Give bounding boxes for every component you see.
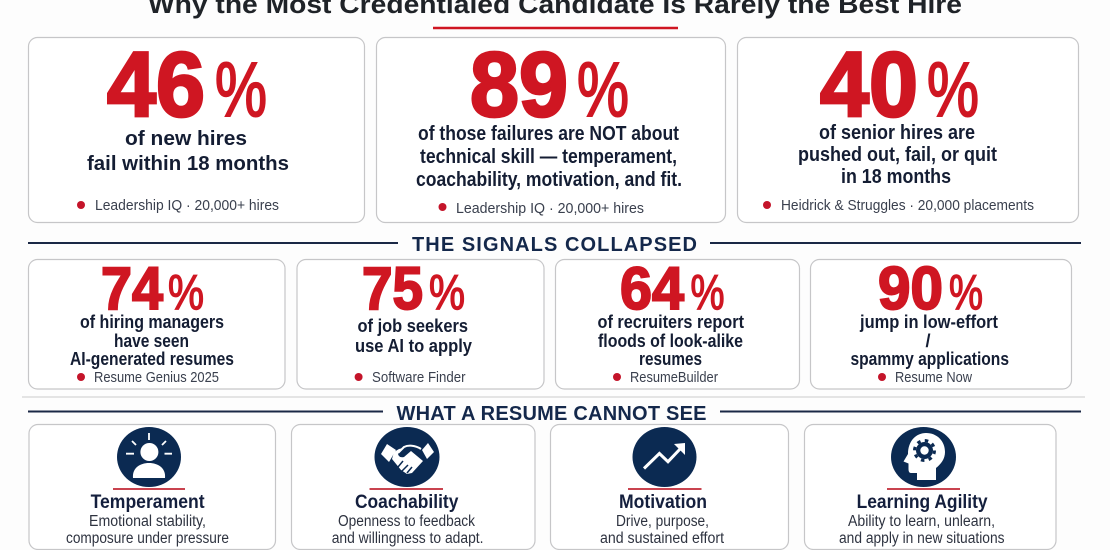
stat: 40%: 40 (820, 34, 918, 136)
panel: 89% not technical (376, 34, 726, 222)
description: of recruiters report (598, 312, 744, 332)
stat: 90%: % (949, 266, 983, 320)
icon: person with rays (117, 427, 181, 487)
stat: 64%: 64 (620, 255, 685, 322)
description (839, 513, 1005, 547)
source: Resume Genius 2025 (94, 369, 219, 386)
description: of hiring managers (80, 312, 224, 332)
description: coachability, motivation, and fit. (416, 168, 682, 191)
description (598, 312, 744, 369)
description (70, 312, 234, 369)
description: pushed out, fail, or quit (798, 143, 997, 166)
source: ResumeBuilder (630, 369, 718, 386)
description: in 18 months (841, 165, 951, 188)
description: jump in low-effort (859, 312, 998, 332)
panel: learning agility (804, 424, 1056, 550)
description (600, 513, 725, 547)
stat: 46%: % (215, 47, 267, 133)
description: / (925, 331, 931, 351)
stat: 89% (470, 34, 629, 136)
stat: 90% (878, 255, 983, 322)
stat: 46%: 46 (107, 34, 205, 136)
source: Software Finder (372, 369, 466, 386)
panel: temperament (29, 424, 276, 550)
description (798, 121, 997, 188)
card title: Motivation (619, 492, 707, 513)
stat: 64% (620, 255, 724, 322)
description: of those failures are NOT about (418, 122, 679, 145)
description: Ability to learn, unlearn, (848, 513, 995, 530)
description: resumes (639, 349, 702, 369)
stat: 46% (107, 34, 267, 136)
description: floods of look-alike (598, 331, 743, 351)
stat: 75% (362, 255, 465, 322)
stat: 74%: % (168, 266, 204, 320)
description: Openness to feedback (338, 513, 475, 530)
panel: 40% senior hires (738, 34, 1078, 222)
panel: 90% spammy applications (810, 255, 1072, 389)
stat: 40%: % (927, 47, 979, 133)
description: of job seekers (358, 316, 468, 336)
description: technical skill — temperament, (420, 145, 677, 168)
panel: coachability (292, 424, 535, 550)
panel: motivation (550, 424, 788, 550)
description: of new hires (125, 127, 247, 150)
description: spammy applications (850, 349, 1009, 369)
description: Emotional stability, (89, 513, 206, 530)
source: Leadership IQ · 20,000+ hires (456, 200, 644, 217)
stat: 74%: 74 (101, 255, 164, 322)
source: Heidrick & Struggles · 20,000 placements (781, 197, 1034, 214)
stat: 90%: 90 (878, 255, 943, 322)
panel: 46% new hires (28, 34, 364, 222)
description: fail within 18 months (87, 152, 289, 175)
icon: rising arrow (632, 427, 696, 487)
panel: 75% job seekers (297, 255, 544, 389)
heading: what a resume cannot see: WHAT A RESUME CANNOT SEE (396, 403, 706, 425)
description: and sustained effort (600, 530, 725, 547)
stat: 64%: % (690, 266, 724, 320)
card title: Coachability (355, 492, 459, 513)
description (355, 316, 472, 356)
description (87, 127, 289, 175)
icon: head with gear (891, 427, 956, 487)
card title: Learning Agility (857, 492, 988, 513)
stat: 75%: % (429, 266, 465, 320)
description (332, 513, 484, 547)
stat: 89%: % (577, 47, 629, 133)
description (850, 312, 1009, 369)
description: and apply in new situations (839, 530, 1005, 547)
panel: 74% hiring managers (28, 255, 285, 389)
panel: 64% recruiters (556, 255, 800, 389)
description: composure under pressure (66, 530, 229, 547)
description: use AI to apply (355, 336, 472, 356)
description: of senior hires are (819, 121, 975, 144)
description: and willingness to adapt. (332, 530, 484, 547)
description: have seen (114, 331, 189, 351)
description (66, 513, 229, 547)
description: Drive, purpose, (616, 513, 709, 530)
description (416, 122, 682, 191)
heading: the signals collapsed: THE SIGNALS COLLAPSED (412, 234, 697, 256)
stat: 89%: 89 (470, 34, 568, 136)
source: Resume Now (895, 369, 972, 386)
card title: Temperament (91, 492, 205, 513)
stat: 75%: 75 (362, 255, 423, 322)
description: AI-generated resumes (70, 349, 234, 369)
stat: 74% (101, 255, 204, 322)
source: Leadership IQ · 20,000+ hires (95, 197, 279, 214)
stat: 40% (820, 34, 979, 136)
icon: handshake (374, 427, 440, 487)
